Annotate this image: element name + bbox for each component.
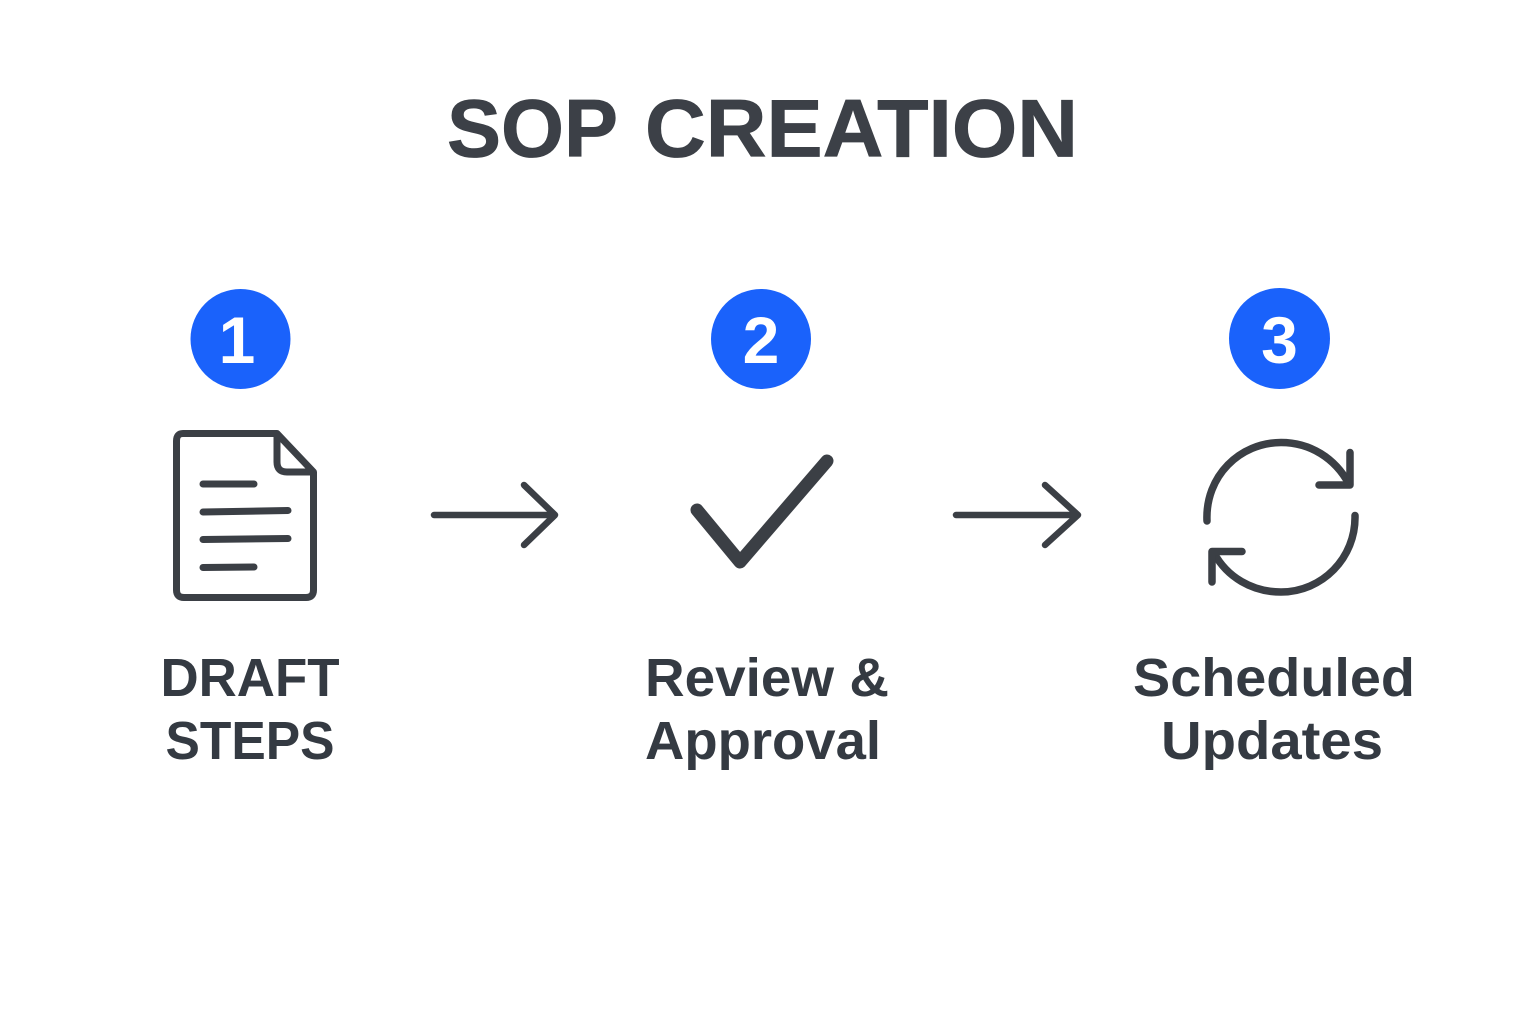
icon: refresh cycle <box>1207 442 1355 592</box>
arrow 2 <box>956 485 1078 545</box>
icon: check mark <box>697 461 827 562</box>
badge 3: 3 <box>1261 303 1298 377</box>
icon: document <box>176 434 314 598</box>
label: scheduled updates: Scheduled <box>1133 648 1415 708</box>
badge 2 <box>711 289 811 389</box>
title: CREATION <box>645 84 1078 174</box>
badge 1 <box>190 289 290 389</box>
label: review and approval: Review & <box>645 648 889 708</box>
badge 1: 1 <box>219 303 255 377</box>
label: draft steps: STEPS <box>166 711 334 771</box>
badge 2: 2 <box>743 303 779 377</box>
label: scheduled updates: Updates <box>1161 711 1383 771</box>
label: draft steps: DRAFT <box>160 648 340 708</box>
badge 3 <box>1229 288 1330 389</box>
step 2 <box>645 289 889 771</box>
title: SOP <box>447 84 618 174</box>
arrow 1 <box>434 485 555 545</box>
step 1 <box>160 289 340 771</box>
step 3 <box>1133 288 1415 771</box>
label: review and approval: Approval <box>645 711 881 771</box>
